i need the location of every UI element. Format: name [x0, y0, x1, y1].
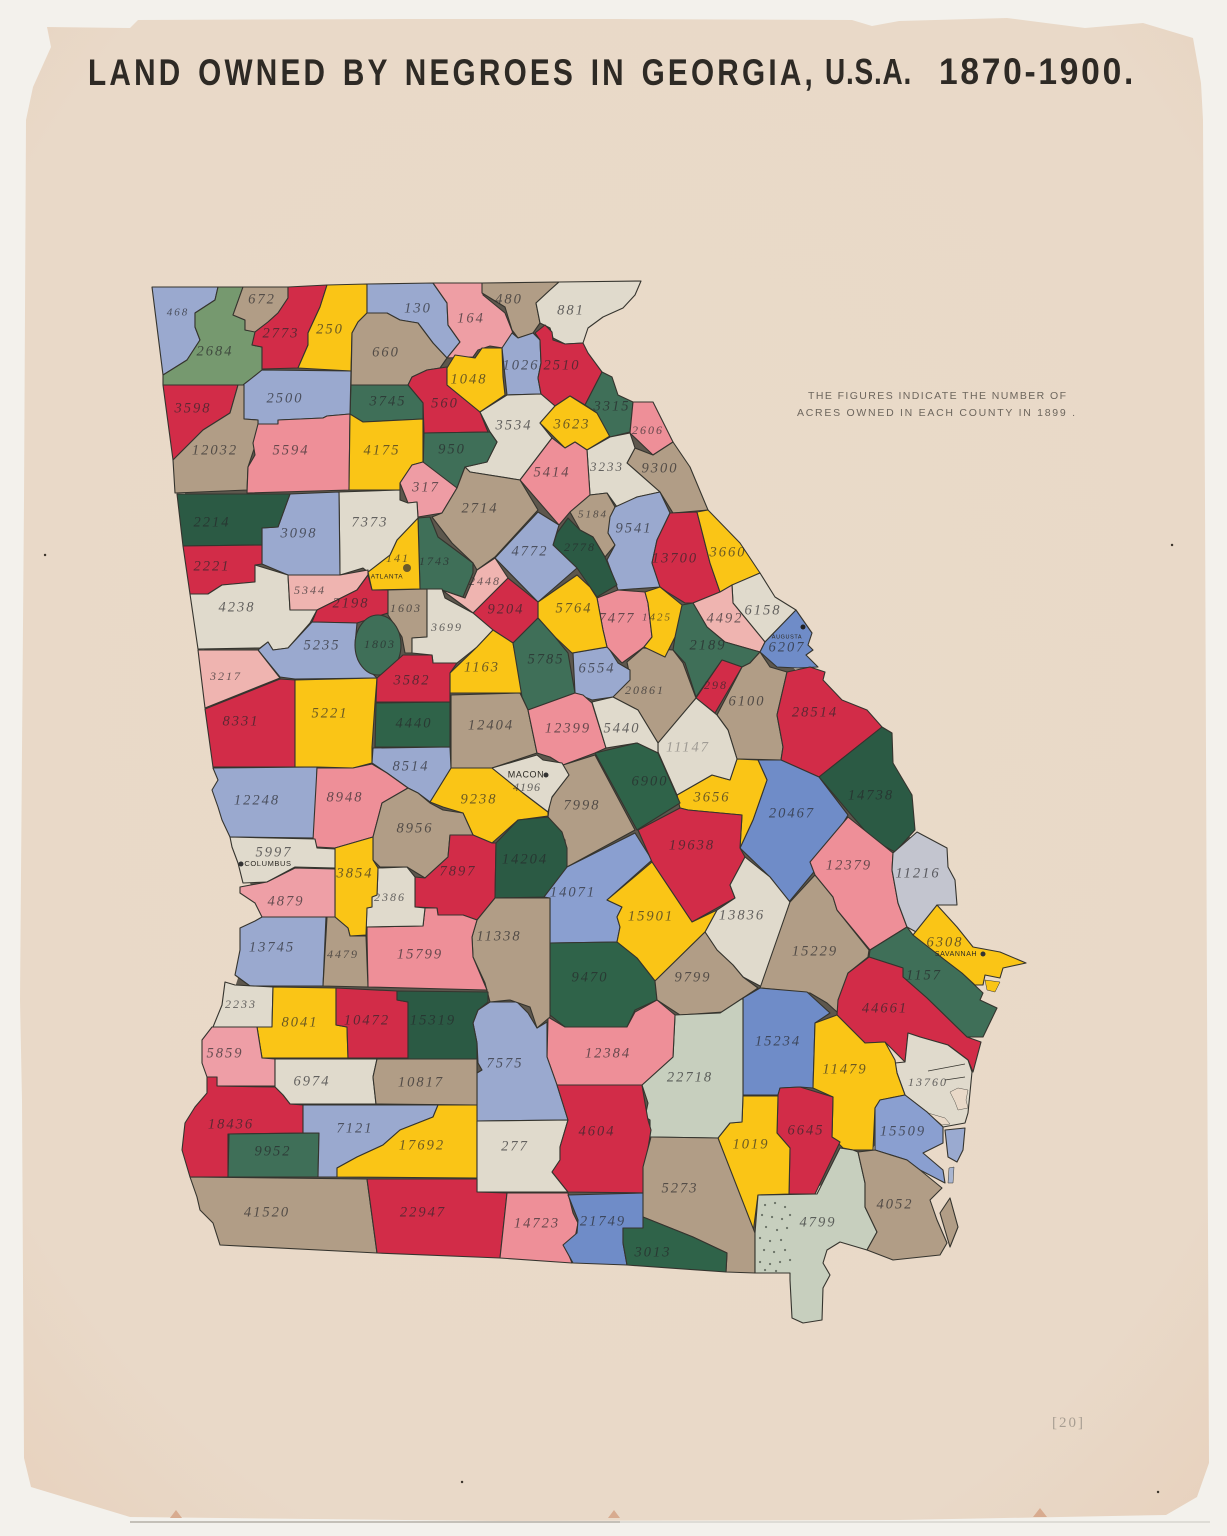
county 2198: 2198 — [332, 595, 370, 611]
county 3582: 3582 — [392, 672, 430, 688]
county 6554 — [573, 647, 630, 700]
county 7897 — [415, 835, 496, 920]
county 4196 with Macon: MACON — [508, 769, 544, 779]
county 3745: 3745 — [368, 393, 406, 409]
county 1163 — [450, 630, 523, 693]
county 20467 — [740, 760, 848, 902]
county 5221: 5221 — [312, 705, 348, 721]
county 3699 — [412, 589, 493, 663]
explanatory note: ACRES OWNED IN EACH COUNTY IN 1899 . — [797, 407, 1075, 419]
county 1603: 1603 — [390, 601, 422, 615]
county 3623: 3623 — [552, 416, 590, 432]
county 4492 — [693, 585, 765, 652]
county 1425 — [642, 587, 682, 657]
county 12404 — [451, 693, 537, 768]
county 18436: 18436 — [208, 1116, 254, 1132]
county 2221: 2221 — [194, 558, 230, 574]
county 3098 — [262, 492, 340, 575]
county 8514: 8514 — [392, 758, 430, 774]
county 22947: 22947 — [400, 1204, 446, 1220]
county 10472 — [336, 988, 408, 1058]
county 3013 — [623, 1217, 727, 1272]
county 3315 — [585, 372, 633, 437]
county 2606 — [630, 402, 673, 455]
county 8331: 8331 — [222, 713, 260, 729]
county 1803: 1803 — [364, 637, 396, 651]
county 20861 — [613, 648, 696, 743]
county 22947 — [367, 1179, 507, 1258]
county 2714: 2714 — [462, 500, 498, 516]
county 14204 — [495, 817, 567, 898]
county 10472: 10472 — [344, 1012, 390, 1028]
county 5594 — [247, 414, 350, 493]
county 4196 with Macon — [492, 755, 569, 812]
county 3854: 3854 — [336, 865, 374, 881]
county 14204: 14204 — [502, 851, 548, 867]
county 13836: 13836 — [719, 907, 765, 923]
county 11338: 11338 — [476, 928, 522, 944]
county 1603 — [388, 589, 427, 653]
county 3233: 3233 — [589, 459, 624, 474]
county 2233 — [213, 982, 273, 1027]
county 6158: 6158 — [744, 602, 782, 618]
county 20467: 20467 — [769, 805, 815, 821]
county 19638: 19638 — [669, 837, 715, 853]
county 4052 — [858, 1150, 958, 1260]
county 8948 — [313, 764, 408, 848]
county 5414 — [520, 438, 590, 525]
county 2198 — [312, 575, 388, 623]
county 6974: 6974 — [294, 1073, 330, 1089]
county 11338 — [472, 898, 550, 1028]
county 6974 — [275, 1059, 377, 1104]
county 950: 950 — [438, 441, 466, 457]
county 298 — [696, 660, 742, 713]
county 8041: 8041 — [282, 1014, 318, 1030]
county 3217: 3217 — [209, 669, 242, 683]
county 4479: 4479 — [327, 947, 359, 961]
county 660: 660 — [372, 344, 400, 360]
county 14738 — [819, 727, 915, 852]
county 15229 — [760, 875, 869, 1012]
county 480: 480 — [495, 291, 523, 307]
county 1048 — [447, 348, 505, 412]
county 317: 317 — [411, 479, 440, 495]
county 4799 stippled: 4799 — [800, 1214, 836, 1230]
county 468: 468 — [167, 307, 189, 319]
county 7477: 7477 — [598, 610, 636, 626]
county 6207 with Augusta: 6207 — [768, 639, 806, 655]
county 2386: 2386 — [374, 890, 406, 904]
county 480 — [482, 282, 559, 338]
county 6158 — [732, 573, 796, 642]
county 9541: 9541 — [616, 520, 652, 536]
county 4238 — [190, 565, 317, 650]
county 164: 164 — [457, 310, 485, 326]
county 8331 — [205, 679, 295, 767]
county 18436 — [182, 1077, 303, 1177]
county 2684 — [163, 287, 262, 385]
county 5344: 5344 — [294, 583, 326, 597]
county 12399: 12399 — [545, 720, 591, 736]
county 5235 — [258, 622, 377, 679]
county 5859 — [202, 1027, 275, 1086]
county 4175: 4175 — [364, 442, 400, 458]
county 3217 — [198, 650, 280, 708]
county 2214: 2214 — [194, 514, 230, 530]
county 15229: 15229 — [792, 943, 838, 959]
county 5859: 5859 — [206, 1045, 244, 1061]
county 13745 — [235, 917, 326, 986]
county 14071 — [544, 833, 652, 943]
county 5235: 5235 — [304, 637, 340, 653]
county 4440 — [375, 702, 450, 747]
county 10817 — [373, 1059, 477, 1105]
county 6308 with Savannah: 6308 — [926, 934, 964, 950]
county 17692 — [337, 1105, 477, 1178]
county 1157 — [869, 927, 997, 1037]
county 4479 — [323, 917, 368, 987]
county 15901 — [607, 862, 717, 981]
county 2773 — [252, 285, 327, 369]
county 4492: 4492 — [706, 610, 744, 626]
county 13700: 13700 — [652, 550, 698, 566]
county 15319: 15319 — [410, 1012, 456, 1028]
county 5440: 5440 — [604, 720, 640, 736]
page number: [20] — [1052, 1415, 1083, 1431]
county 3233 — [587, 433, 660, 507]
county 17692: 17692 — [399, 1137, 445, 1153]
county 7373 — [339, 490, 418, 575]
county 13745: 13745 — [249, 939, 295, 955]
county 12248: 12248 — [234, 792, 280, 808]
county 277 — [477, 1120, 568, 1192]
county 2500: 2500 — [266, 390, 304, 406]
county 9238: 9238 — [460, 791, 498, 807]
explanatory note — [797, 390, 1075, 419]
county 2606: 2606 — [632, 423, 664, 437]
county 141 with Atlanta — [368, 518, 420, 590]
county 881 — [536, 281, 641, 344]
county 672: 672 — [248, 291, 276, 307]
county 8514 — [372, 747, 451, 802]
county 2510 — [535, 325, 602, 406]
county 2714 — [432, 467, 538, 570]
county 21749: 21749 — [580, 1213, 626, 1229]
county 7121: 7121 — [336, 1120, 374, 1136]
county 3854 — [335, 837, 378, 936]
county 130 — [367, 283, 460, 358]
county 20861: 20861 — [625, 683, 665, 697]
county 9470: 9470 — [572, 969, 608, 985]
county 9300 — [627, 442, 708, 513]
county 250: 250 — [316, 321, 344, 337]
county 2510: 2510 — [544, 357, 580, 373]
county 5594: 5594 — [272, 442, 310, 458]
county 28514 — [777, 667, 882, 777]
county 660 — [351, 313, 447, 385]
county 11147: 11147 — [666, 739, 710, 755]
county 277: 277 — [501, 1138, 529, 1154]
county 22718: 22718 — [667, 1069, 713, 1085]
county 13700 — [652, 512, 720, 603]
county 3534 — [465, 394, 555, 480]
county 13760 — [895, 1033, 972, 1127]
county 10817: 10817 — [398, 1074, 444, 1090]
county 4879 — [240, 868, 335, 917]
county 6554: 6554 — [578, 660, 616, 676]
title: LAND OWNED BY NEGROES IN GEORGIA, — [88, 52, 816, 93]
county 12379: 12379 — [826, 857, 872, 873]
county 6207 with Augusta: AUGUSTA — [772, 634, 802, 640]
county 5785: 5785 — [528, 651, 564, 667]
county 2778: 2778 — [564, 540, 596, 554]
county 6900 — [595, 743, 680, 830]
county 560 — [408, 367, 488, 433]
county 9799: 9799 — [674, 969, 712, 985]
title: U.S.A. — [825, 51, 912, 92]
county 3660: 3660 — [708, 544, 746, 560]
map of Georgia counties — [152, 281, 1026, 1323]
county 9204: 9204 — [488, 601, 524, 617]
county 6645 — [777, 1087, 840, 1194]
county 3315: 3315 — [592, 398, 630, 414]
county 11216: 11216 — [895, 865, 941, 881]
county 3098: 3098 — [280, 525, 318, 541]
county 317 — [400, 462, 457, 517]
county 4772: 4772 — [512, 543, 548, 559]
county 15319 — [397, 991, 488, 1059]
county 3013: 3013 — [634, 1244, 672, 1260]
county 44661: 44661 — [862, 1000, 908, 1016]
county 6308 with Savannah — [913, 905, 1026, 992]
county 11147 — [658, 698, 737, 795]
county 3699: 3699 — [430, 620, 463, 634]
county 12379 — [810, 817, 907, 950]
county 5785 — [513, 618, 575, 710]
county 15799 — [367, 908, 487, 990]
county 6645: 6645 — [788, 1122, 824, 1138]
county 12384 — [547, 1000, 675, 1085]
county 4052: 4052 — [876, 1196, 914, 1212]
county 4604: 4604 — [578, 1123, 616, 1139]
county 2500 — [243, 370, 351, 424]
county 9799 — [655, 932, 758, 1015]
county 2189: 2189 — [690, 637, 726, 653]
county 12032 — [173, 385, 258, 493]
county 9238 — [430, 768, 548, 843]
county 164 — [433, 283, 513, 358]
county 8948: 8948 — [326, 789, 364, 805]
county 19638 — [638, 808, 745, 922]
county 1743: 1743 — [419, 554, 451, 568]
county 6900: 6900 — [632, 773, 668, 789]
county 41520 — [190, 1177, 377, 1253]
county 4604 — [552, 1085, 651, 1193]
county 13836 — [705, 857, 790, 987]
county 5344 — [288, 570, 368, 610]
county 12399 — [528, 693, 606, 765]
county 5273 — [643, 1137, 755, 1273]
county 12384: 12384 — [585, 1045, 631, 1061]
county 6100 — [717, 652, 787, 760]
county 3656 — [677, 759, 767, 848]
county 9952 — [228, 1133, 319, 1177]
county 9952: 9952 — [254, 1143, 292, 1159]
county 12032: 12032 — [192, 442, 238, 458]
county 7897: 7897 — [440, 863, 476, 879]
county 13760: 13760 — [908, 1075, 948, 1089]
county 28514: 28514 — [792, 704, 838, 720]
county 15509: 15509 — [880, 1123, 926, 1139]
county 2773: 2773 — [262, 325, 300, 341]
county 2214 — [177, 494, 290, 546]
county 5764: 5764 — [556, 600, 592, 616]
county 6308 with Savannah: SAVANNAH — [935, 951, 977, 958]
county 9300: 9300 — [642, 460, 678, 476]
county 3745 — [350, 385, 423, 422]
county 1026: 1026 — [502, 357, 540, 373]
county 2448 — [442, 558, 508, 613]
county 1163: 1163 — [464, 659, 500, 675]
county 3656: 3656 — [692, 789, 730, 805]
county 14071: 14071 — [550, 884, 596, 900]
county 12404: 12404 — [468, 717, 514, 733]
county 672 — [233, 287, 288, 332]
county 15234: 15234 — [755, 1033, 801, 1049]
county 5764 — [538, 575, 607, 653]
county 3598 — [163, 385, 238, 460]
county 4238: 4238 — [218, 599, 256, 615]
county 9470 — [550, 942, 657, 1027]
county 1425: 1425 — [642, 612, 672, 624]
county 3623 — [540, 396, 610, 450]
county 2684: 2684 — [196, 343, 234, 359]
county 141 with Atlanta: 141 — [386, 551, 410, 565]
county 11216 — [892, 832, 957, 933]
county 1743 — [418, 517, 473, 597]
county 5997 with Columbus: 5997 — [256, 844, 292, 860]
county 560: 560 — [431, 395, 459, 411]
county 2386 — [366, 867, 425, 927]
county 7575 — [473, 1002, 568, 1121]
county 3660 — [697, 510, 760, 592]
county 7121 — [303, 1105, 438, 1177]
county 1019: 1019 — [732, 1136, 770, 1152]
county 5273: 5273 — [662, 1180, 698, 1196]
county 141 with Atlanta: ATLANTA — [371, 574, 403, 581]
county 5997 with Columbus: COLUMBUS — [244, 859, 292, 868]
county 12248 — [212, 767, 317, 838]
county 5997 with Columbus — [230, 837, 335, 883]
county 468 — [152, 287, 218, 375]
county 4175 — [349, 414, 423, 490]
county 7998 — [548, 755, 635, 867]
county 2189 — [673, 603, 760, 697]
county 1803 — [355, 615, 401, 675]
county 6207 with Augusta — [760, 610, 818, 668]
explanatory note: THE FIGURES INDICATE THE NUMBER OF — [808, 390, 1066, 402]
county 7998: 7998 — [564, 797, 600, 813]
title: 1870-1900. — [939, 51, 1136, 92]
county 8041 — [257, 987, 348, 1058]
county 1157: 1157 — [906, 967, 942, 983]
county 4879: 4879 — [268, 893, 304, 909]
county 5184 — [570, 493, 615, 557]
county 1026 — [502, 333, 541, 395]
county 7477 — [597, 590, 652, 663]
county 4772 — [495, 512, 577, 602]
county 950 — [423, 432, 497, 488]
county 250 — [298, 284, 367, 371]
county 5440 — [592, 697, 658, 753]
county 4440: 4440 — [396, 715, 432, 731]
county 3598: 3598 — [174, 400, 212, 416]
county 9204 — [473, 578, 538, 643]
county 11479: 11479 — [822, 1061, 868, 1077]
county 3534: 3534 — [494, 417, 532, 433]
county 5184: 5184 — [578, 509, 608, 521]
county 4196 with Macon: 4196 — [513, 780, 541, 794]
county 5414: 5414 — [534, 464, 570, 480]
county 8956: 8956 — [396, 820, 434, 836]
county 15509 — [875, 1095, 965, 1183]
county 41520: 41520 — [244, 1204, 290, 1220]
county 7575: 7575 — [486, 1055, 524, 1071]
county 15234 — [743, 988, 830, 1095]
county 130: 130 — [404, 300, 432, 316]
county 21749 — [563, 1193, 645, 1265]
county 298: 298 — [704, 678, 728, 692]
county 6100: 6100 — [728, 693, 766, 709]
county 881: 881 — [557, 302, 585, 318]
county 44661 — [837, 957, 981, 1072]
county 1019 — [718, 1096, 790, 1233]
county 11479 — [813, 1015, 905, 1150]
county 8956 — [373, 788, 473, 878]
county 14723: 14723 — [514, 1215, 560, 1231]
county 3582 — [376, 655, 457, 702]
county 2221 — [183, 545, 262, 594]
county 14723 — [500, 1193, 578, 1263]
county 2778 — [553, 518, 617, 597]
county 5221 — [295, 678, 377, 768]
county 1048: 1048 — [450, 371, 488, 387]
county 22718 — [642, 998, 743, 1138]
county 7373: 7373 — [352, 514, 388, 530]
county 4799 stippled — [755, 1148, 877, 1323]
county 15799: 15799 — [397, 946, 443, 962]
county 14738: 14738 — [848, 787, 894, 803]
county 9541 — [607, 492, 670, 590]
county 2233: 2233 — [225, 997, 257, 1011]
county 2448: 2448 — [469, 574, 501, 588]
county 15901: 15901 — [628, 908, 674, 924]
